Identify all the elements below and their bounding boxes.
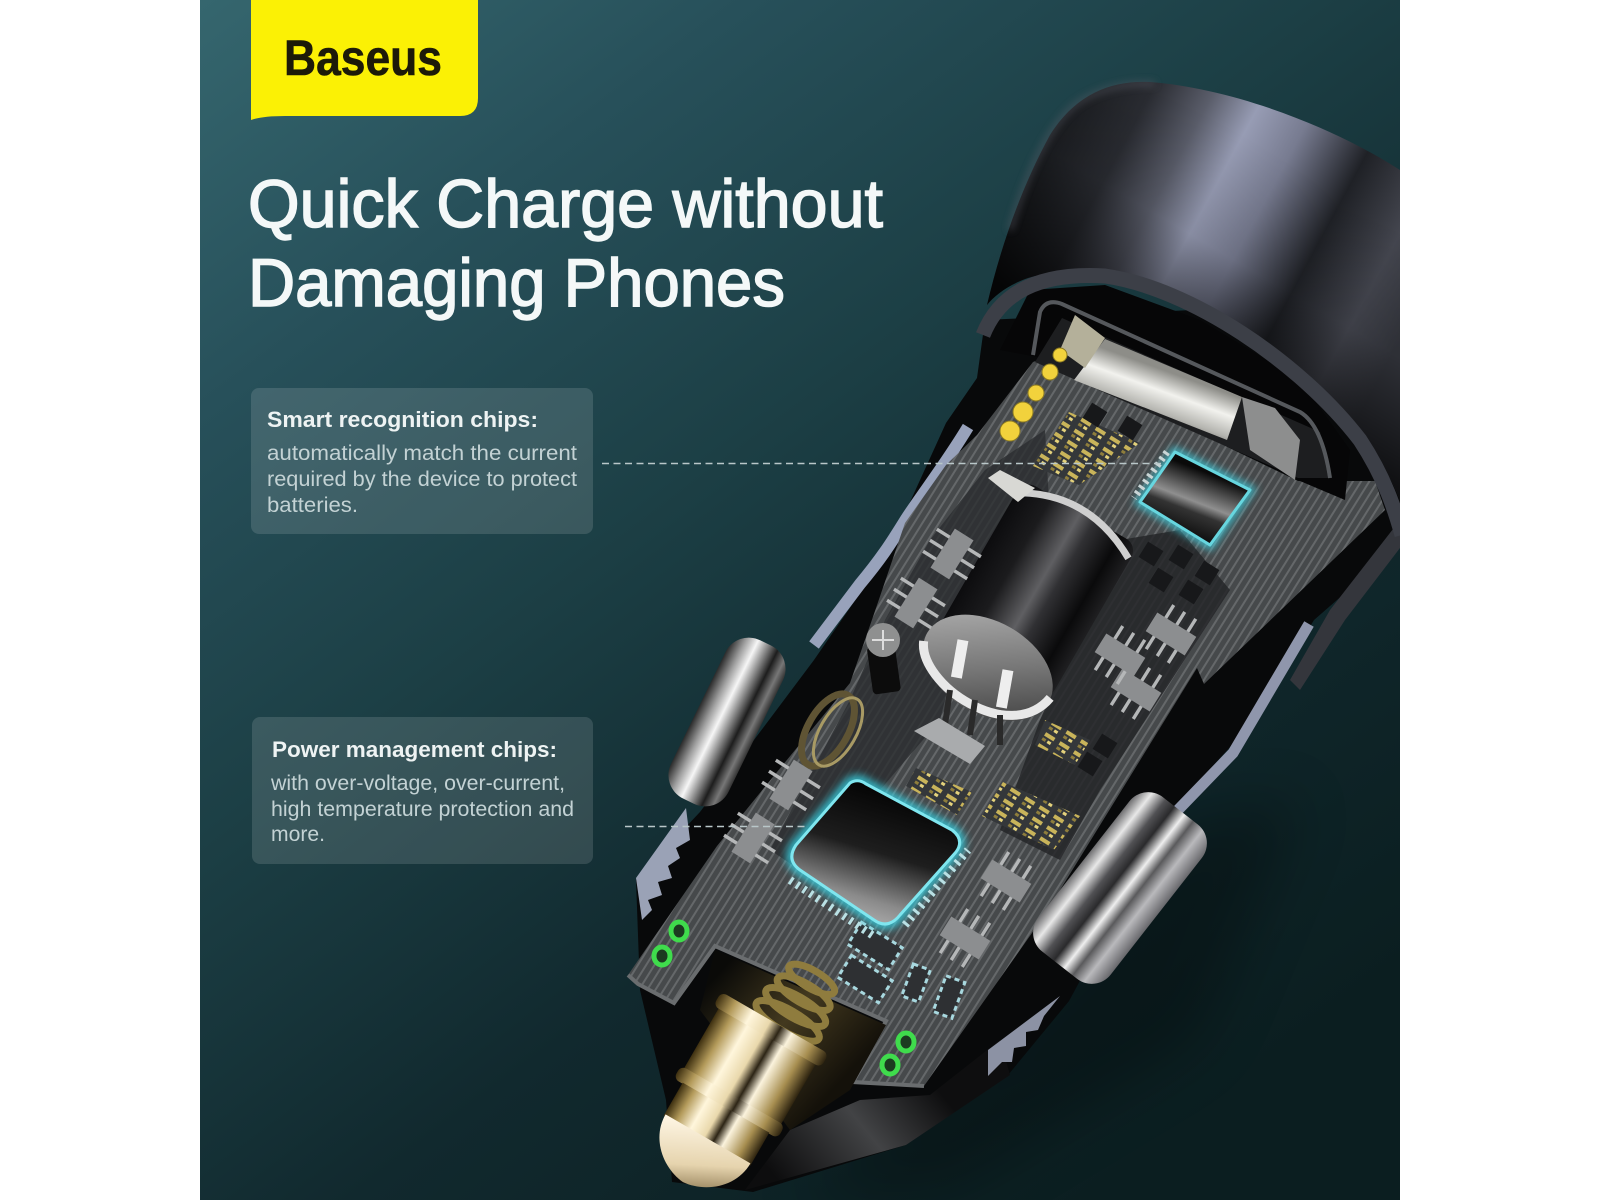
plug ring [674, 1066, 785, 1139]
small outlined parts near lower chip [838, 922, 965, 1018]
right teeth [988, 996, 1060, 1076]
capacitor can [944, 484, 1133, 692]
charger shadow [876, 828, 1257, 1174]
callout body: batteries. [267, 494, 358, 517]
large flat component [914, 718, 985, 764]
notch behind the plug [700, 950, 886, 1130]
lower chip glow [792, 781, 960, 924]
gold contacts [1000, 348, 1067, 441]
charger body shell [636, 300, 1400, 1192]
upper board behind connector [1035, 318, 1328, 478]
large capacitor [918, 484, 1133, 721]
title line 1: Quick Charge without [248, 166, 883, 242]
plug barrel [683, 1007, 816, 1127]
cap top edge highlight [1010, 84, 1155, 230]
small black components [1078, 403, 1219, 776]
upper gold pad grid [1033, 412, 1140, 485]
inner frame of the opening [1033, 302, 1330, 478]
upper chip pins [1134, 452, 1167, 498]
plug lower barrel [664, 1083, 769, 1166]
left spring contact [668, 638, 786, 806]
USB connector [1074, 339, 1242, 440]
background panel [200, 0, 1400, 1200]
callout body: more. [271, 823, 325, 846]
title line 2: Damaging Phones [248, 245, 785, 321]
cap [987, 82, 1400, 500]
green test points [654, 922, 914, 1074]
USB connector right bracket [1242, 397, 1300, 480]
callout heading: Smart recognition chips: [267, 407, 538, 432]
lower gold pad grid A [906, 768, 972, 815]
plug tip [641, 1114, 750, 1200]
white tab above capacitor [988, 470, 1035, 502]
nose of the shell [768, 1074, 1010, 1178]
capacitor base bright ring [918, 640, 1054, 720]
yellow tag shape [251, 0, 478, 120]
integrated circuits [719, 521, 1204, 972]
callout body: with over-voltage, over-current, [270, 772, 565, 795]
lower right small parts [1035, 720, 1090, 765]
electrolytic capacitor [866, 623, 901, 695]
circuit board [628, 358, 1385, 1086]
rim ring [983, 275, 1402, 535]
gold coil [798, 690, 864, 770]
charger illustration [628, 82, 1402, 1200]
callout body [270, 772, 574, 846]
callout body: required by the device to protect [267, 468, 577, 491]
lower chip [792, 781, 960, 924]
left wall highlight [814, 427, 968, 645]
title [248, 166, 883, 321]
brand name: Baseus [284, 30, 442, 86]
plug spring [751, 954, 847, 1048]
gold plug [629, 936, 861, 1200]
callout: power management chips [252, 717, 593, 864]
plug flange [713, 992, 829, 1068]
capacitor base [924, 614, 1053, 721]
right body section [1290, 520, 1400, 690]
upper chip [1140, 452, 1250, 545]
USB connector left bracket [1060, 315, 1105, 368]
callout body: high temperature protection and [271, 798, 574, 821]
callout heading: Power management chips: [272, 737, 557, 762]
brand tag [251, 0, 478, 120]
board front edge [628, 946, 924, 1086]
lower gold pad grid B [982, 782, 1080, 850]
callout panel [252, 717, 593, 864]
lower chip pins [790, 850, 968, 937]
cap opening backing [1000, 285, 1350, 500]
capacitor pins [951, 639, 1013, 709]
leader line: power management chips [625, 826, 805, 828]
capacitor legs [945, 690, 1000, 745]
board dark right area [1000, 530, 1230, 860]
capacitor top ring [1024, 490, 1132, 560]
left teeth [636, 808, 690, 920]
board dark inner area [770, 430, 1050, 870]
callout panel [251, 388, 593, 534]
leader line: smart recognition chips [602, 462, 1166, 464]
right wall highlight [1176, 624, 1309, 812]
cap lower shadow [987, 82, 1400, 500]
callout body [267, 442, 577, 517]
upper chip glow [1140, 452, 1250, 545]
callout body: automatically match the current [267, 442, 577, 465]
callout: smart recognition chips [251, 388, 593, 534]
right spring contact [1033, 792, 1207, 984]
